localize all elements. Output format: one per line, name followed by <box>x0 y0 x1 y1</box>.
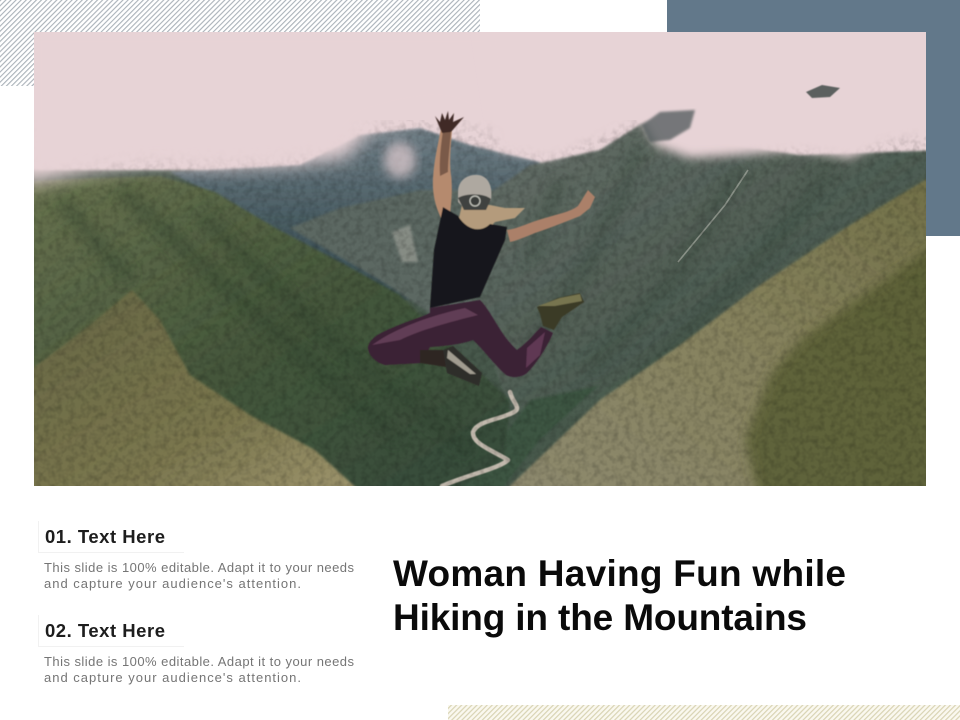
valley floor <box>467 386 596 486</box>
cap <box>458 175 491 208</box>
hatched strip: bottom right <box>448 705 960 720</box>
left green mountain <box>34 176 510 486</box>
right mountain range <box>494 120 926 406</box>
river <box>442 392 517 486</box>
heading 01: 01. Text Here <box>45 526 165 547</box>
body 01: and capture your audience's attention. <box>44 576 301 591</box>
title: Hiking in the Mountains <box>393 597 807 638</box>
cap ring <box>470 196 480 206</box>
valley base <box>34 168 586 486</box>
slate block: top right <box>667 0 960 236</box>
photo grain <box>34 120 926 486</box>
heading 01 frame <box>38 521 184 552</box>
right slope dark forest band <box>742 248 926 486</box>
heading 02 frame <box>38 615 184 646</box>
forearm shade <box>440 130 451 176</box>
body 01: This slide is 100% editable. Adapt it to your needs <box>44 560 354 575</box>
low clouds right <box>496 116 926 165</box>
shoe top tone <box>538 294 582 306</box>
raised arm <box>433 128 452 220</box>
dark peak in cloud <box>806 85 840 98</box>
lower shoe <box>443 346 482 386</box>
low clouds left <box>34 120 496 196</box>
foreground left hill <box>34 290 356 486</box>
text block 01 <box>38 521 354 591</box>
figure: jumping woman <box>368 111 595 386</box>
hatched panel: top left <box>0 0 480 86</box>
sky and cloud <box>72 109 926 171</box>
cliff valley <box>292 191 471 313</box>
dark ridge in cloud <box>642 110 695 142</box>
left mountain shadow folds <box>58 188 300 330</box>
heading 02: 02. Text Here <box>45 620 165 641</box>
mountain ridges <box>528 154 824 362</box>
landscape layers <box>34 120 926 486</box>
blonde hair <box>458 204 525 230</box>
cloud wisp <box>384 142 416 178</box>
photo: woman jumping in the mountains <box>34 32 926 486</box>
calf highlight <box>526 332 545 368</box>
cliff pale rock <box>392 225 418 262</box>
raised hand <box>435 111 464 133</box>
waterfall streak <box>678 170 748 262</box>
leggings <box>368 300 553 377</box>
title: Woman Having Fun while <box>393 553 846 594</box>
torso: black top <box>430 207 507 308</box>
sock <box>420 350 446 367</box>
right foreground slope <box>508 178 926 486</box>
text block 02 <box>38 615 354 685</box>
raised shoe <box>537 293 584 330</box>
cap band <box>458 194 491 210</box>
body 02: and capture your audience's attention. <box>44 670 301 685</box>
distant blue mountains <box>172 126 541 288</box>
extended arm <box>507 190 595 242</box>
body 02: This slide is 100% editable. Adapt it to your needs <box>44 654 354 669</box>
legging highlights <box>372 308 478 345</box>
lower shoe lace <box>447 350 476 374</box>
